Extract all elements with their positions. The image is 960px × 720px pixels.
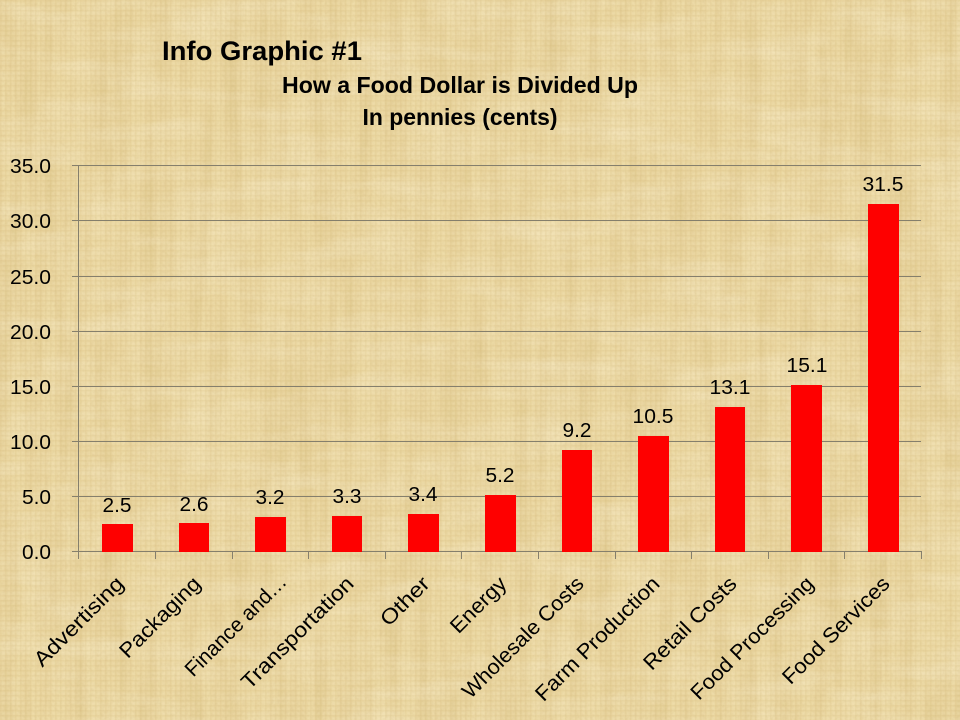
value labels: 10.5 xyxy=(632,405,674,428)
value labels xyxy=(102,173,904,517)
chart title xyxy=(282,72,638,130)
gridlines and axes xyxy=(72,165,922,559)
value labels: 3.3 xyxy=(332,485,362,508)
category labels: Food Services xyxy=(778,572,895,689)
chart title: In pennies (cents) xyxy=(362,104,558,130)
category labels: Finance and… xyxy=(181,570,292,681)
y axis labels: 5.0 xyxy=(22,486,51,509)
value labels: 3.4 xyxy=(408,483,438,506)
y axis labels xyxy=(10,155,51,564)
value labels: 2.5 xyxy=(102,494,132,517)
y axis labels: 30.0 xyxy=(10,210,51,233)
value labels: 31.5 xyxy=(862,173,904,196)
value labels: 9.2 xyxy=(562,419,592,442)
category labels: Retail Costs xyxy=(639,572,742,675)
y axis labels: 10.0 xyxy=(10,431,51,454)
bars xyxy=(102,204,899,552)
bar chart xyxy=(10,155,922,706)
chart title: How a Food Dollar is Divided Up xyxy=(282,72,638,98)
category labels: Packaging xyxy=(115,572,206,663)
heading: Info Graphic #1: Info Graphic #1 xyxy=(162,36,362,66)
value labels: 15.1 xyxy=(786,354,828,377)
y axis labels: 20.0 xyxy=(10,321,51,344)
category labels: Wholesale Costs xyxy=(458,572,589,703)
y axis labels: 15.0 xyxy=(10,376,51,399)
y axis labels: 35.0 xyxy=(10,155,51,178)
y axis labels: 25.0 xyxy=(10,266,51,289)
category labels: Advertising xyxy=(30,572,129,671)
value labels: 2.6 xyxy=(180,493,208,516)
category labels: Farm Production xyxy=(531,572,665,706)
category labels: Energy xyxy=(446,572,512,638)
value labels: 3.2 xyxy=(256,486,284,509)
category labels: Other xyxy=(376,572,435,631)
category labels xyxy=(30,570,895,706)
value labels: 13.1 xyxy=(710,376,750,399)
category labels: Food Processing xyxy=(686,572,819,705)
value labels: 5.2 xyxy=(486,464,514,487)
category labels: Transportation xyxy=(237,572,359,694)
y axis labels: 0.0 xyxy=(22,541,51,564)
